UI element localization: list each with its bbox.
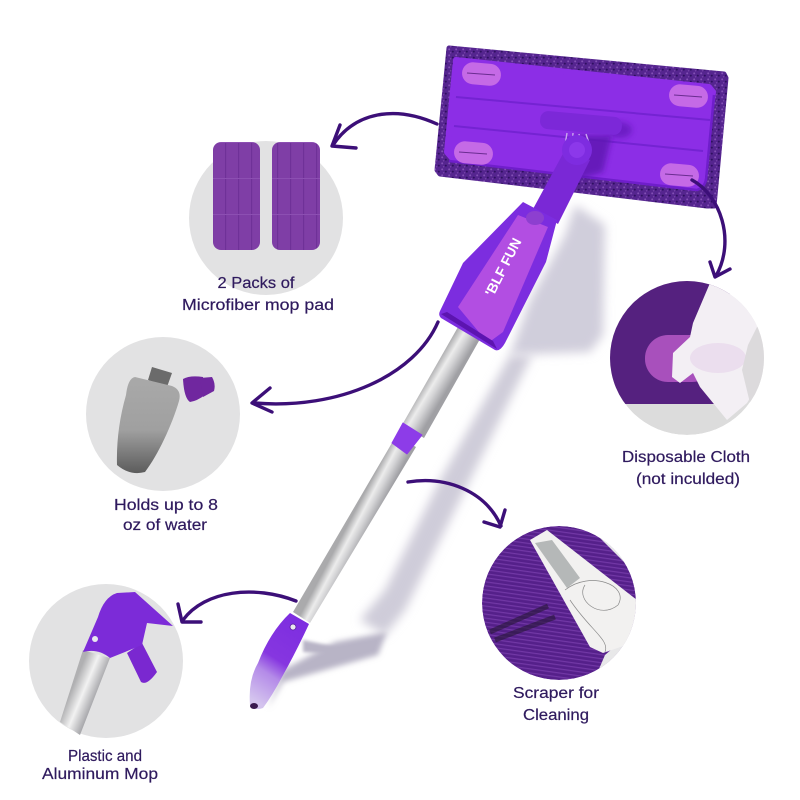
label: disposable cloth: (not inculded) [636, 471, 740, 488]
label: bottle capacity: Holds up to 8 [114, 497, 218, 514]
mop: handle body [439, 202, 557, 350]
aluminum tube [60, 650, 110, 735]
icon: right pad [272, 142, 320, 250]
panel: plastic and aluminum detail [29, 584, 183, 738]
arrow: to bottle [252, 322, 438, 412]
label: scraper: Cleaning [523, 707, 589, 724]
label: disposable cloth [622, 449, 750, 488]
label: scraper: Scraper for [513, 685, 599, 702]
label: plastic and aluminum: Plastic and [68, 748, 142, 765]
attachment slots [453, 61, 709, 188]
icon: purple cap [183, 376, 215, 402]
label: microfiber pad: Microfiber mop pad [182, 297, 334, 314]
icon: bottle [117, 367, 180, 473]
label: microfiber pad: 2 Packs of [218, 275, 295, 292]
mop: pad and head [437, 48, 726, 224]
arrow: to plastic detail [178, 592, 296, 622]
purple trigger [127, 643, 157, 683]
purple head [83, 592, 173, 658]
mop drop shadows [268, 205, 605, 708]
label: plastic and aluminum [42, 748, 158, 783]
panel: disposable cloth [610, 281, 764, 435]
icon: left pad [213, 142, 260, 250]
mop: pole and tip [250, 320, 484, 709]
mop: handle body: 'BLF FUN [482, 235, 524, 299]
arrow: to mop pads [332, 114, 437, 148]
label: bottle capacity: oz of water [123, 517, 207, 534]
label: scraper [513, 685, 599, 724]
label: bottle capacity [114, 497, 218, 534]
panel: water bottle [86, 337, 240, 491]
panel: scraper [482, 526, 636, 680]
label: plastic and aluminum: Aluminum Mop [42, 766, 158, 783]
label: disposable cloth: Disposable Cloth [622, 449, 750, 466]
arrow: to scraper [408, 481, 505, 527]
panel: microfiber mop pads [189, 141, 343, 295]
T-bar joint [539, 110, 623, 136]
neck and swivel [533, 150, 590, 224]
arrow: to disposable cloth [692, 180, 730, 277]
label: microfiber pad [182, 275, 334, 314]
